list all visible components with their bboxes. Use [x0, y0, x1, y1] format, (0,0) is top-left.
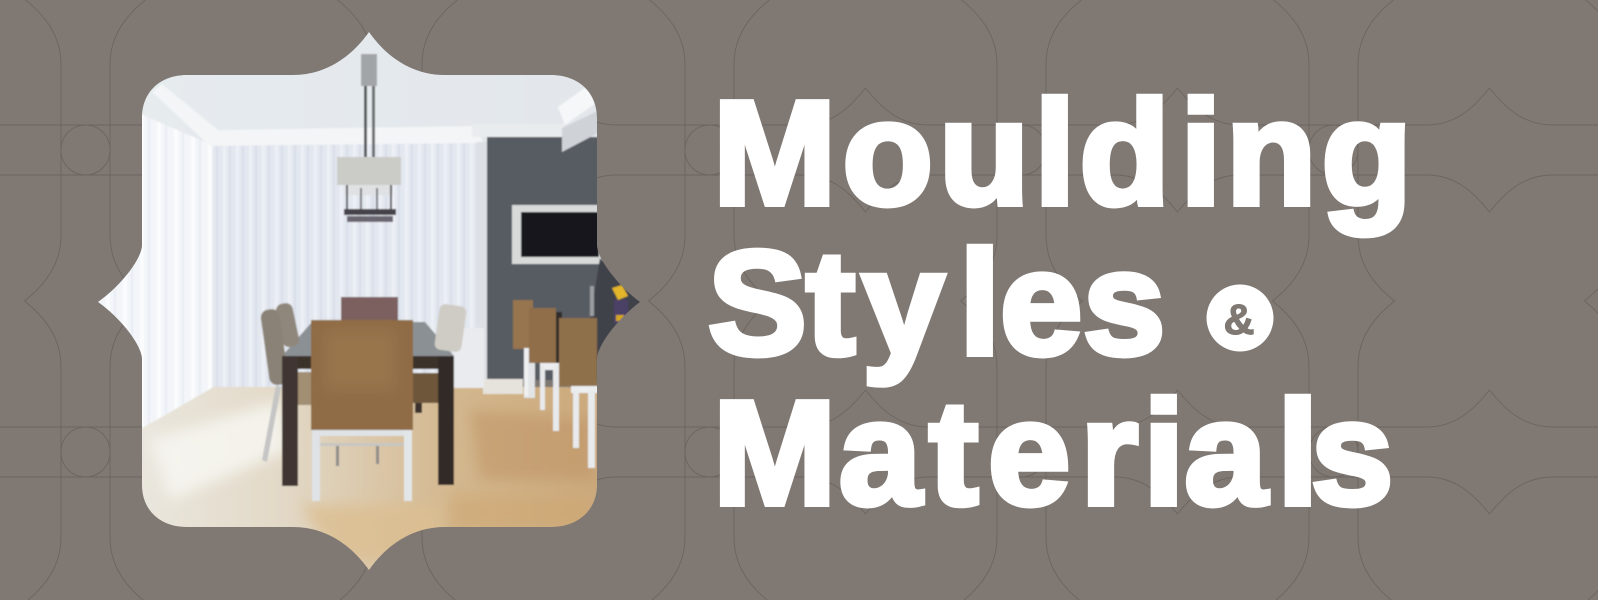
pendant lamp	[337, 54, 401, 222]
title line: Materials: Materials	[713, 371, 1393, 536]
title line: Styles: Styles	[708, 221, 1165, 386]
wall pier	[476, 142, 487, 382]
far chair	[341, 297, 398, 321]
floor reflections	[150, 400, 595, 560]
framed dining room photo	[90, 25, 650, 577]
ampersand badge	[1206, 284, 1274, 352]
back curtain	[210, 142, 485, 388]
right side chairs	[413, 303, 467, 413]
bar stools	[513, 300, 601, 468]
ceiling	[142, 32, 597, 143]
title: Moulding Styles & Materials	[708, 71, 1412, 536]
front chair	[311, 320, 413, 501]
floor	[142, 386, 597, 570]
glass table top	[282, 322, 454, 356]
crown moulding	[152, 84, 600, 146]
left curtain	[98, 114, 212, 428]
title line: Moulding: Moulding	[713, 71, 1412, 236]
ampersand badge: &	[1223, 296, 1255, 344]
left side chairs	[260, 302, 314, 462]
baseboard	[483, 379, 523, 394]
television	[512, 205, 605, 264]
right ceiling return	[562, 110, 600, 152]
table	[282, 356, 454, 486]
counter and objects	[589, 258, 640, 359]
wainscot by table	[452, 328, 484, 388]
dark wall	[487, 137, 602, 380]
